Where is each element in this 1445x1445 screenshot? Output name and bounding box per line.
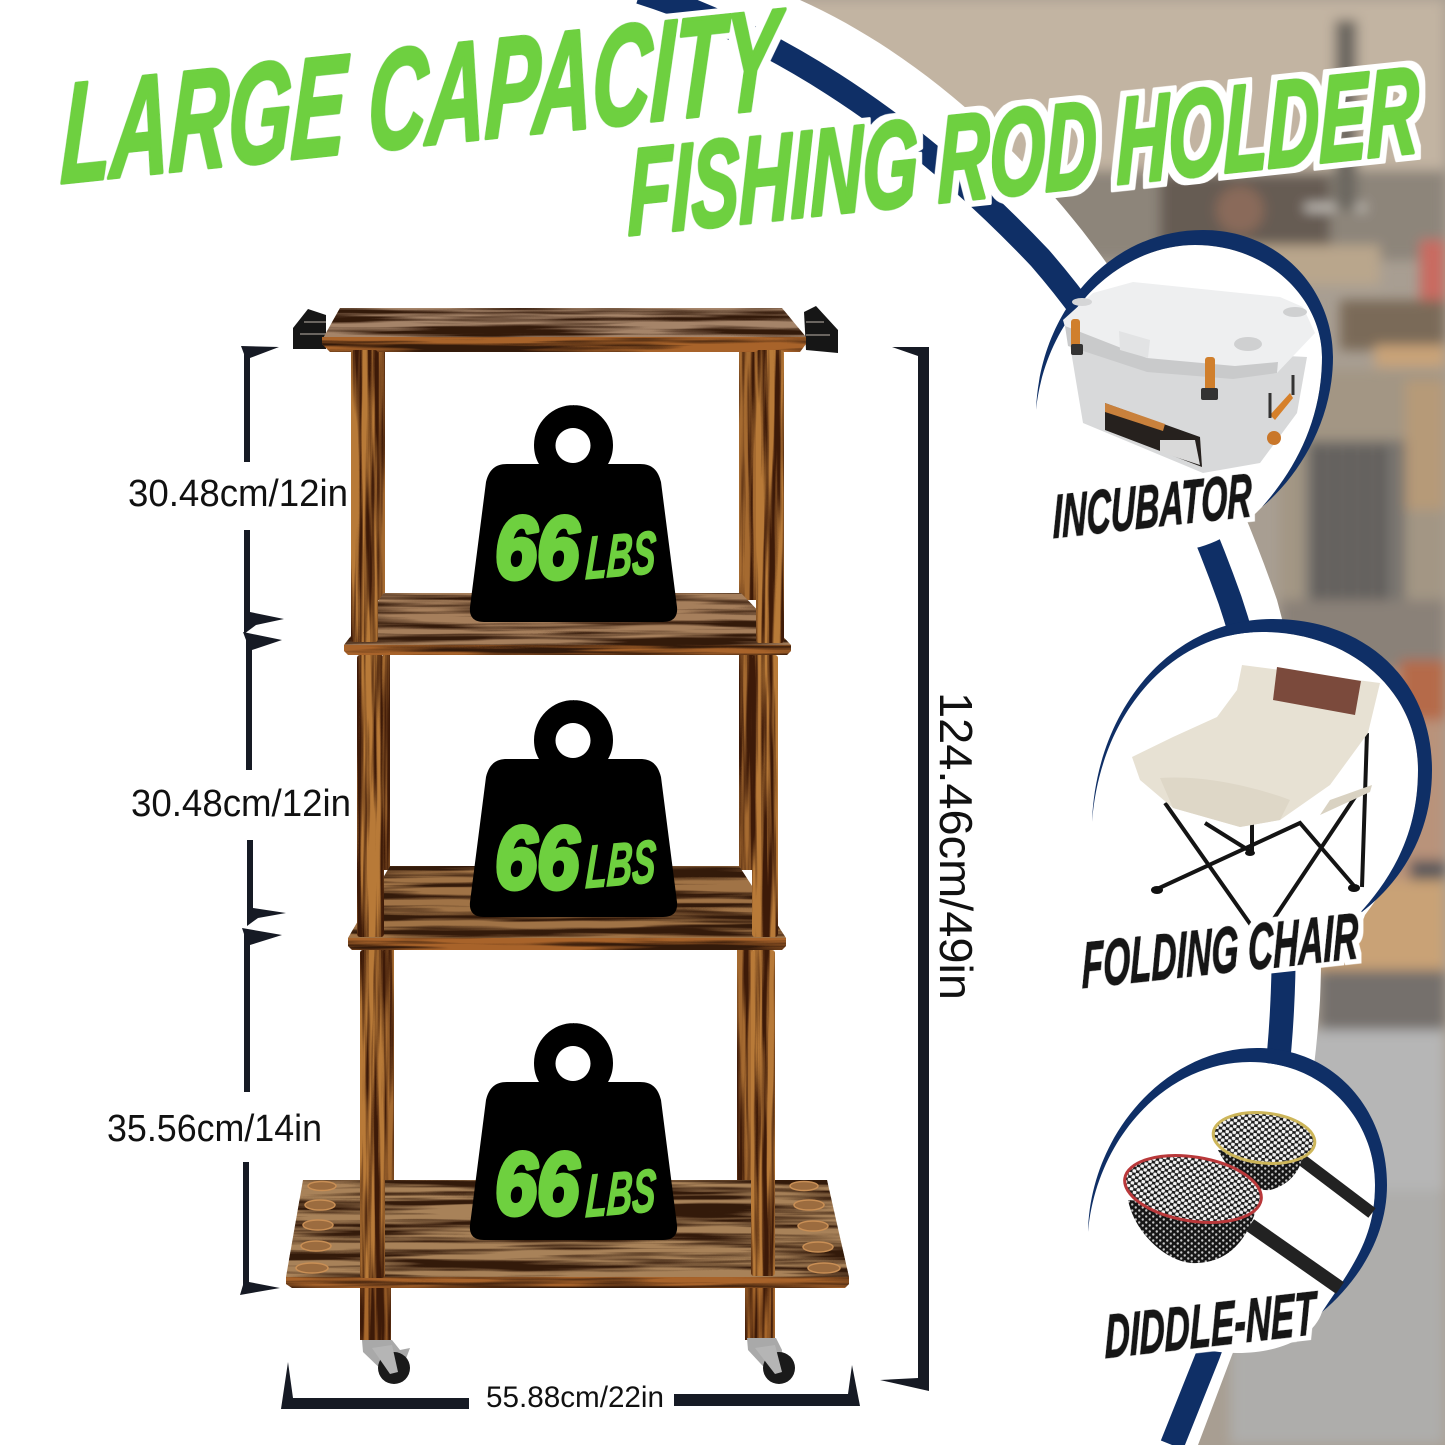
icon: nets xyxy=(1120,1108,1372,1288)
66 LBS label: 66 xyxy=(495,1134,580,1233)
rear posts xyxy=(376,350,759,1185)
width label: 55.88cm/22in xyxy=(486,1381,664,1414)
66 LBS label: LBS xyxy=(584,1156,658,1230)
height dimension line xyxy=(880,347,929,1391)
icon: chair xyxy=(1132,665,1380,928)
66 LBS label: 66 xyxy=(495,808,580,907)
casters xyxy=(362,1338,795,1384)
panel: diddle net xyxy=(1088,1048,1387,1371)
66 LBS label: LBS xyxy=(584,518,658,592)
66 LBS label: LBS xyxy=(584,827,658,901)
dimension label upper: 30.48cm/12in xyxy=(128,473,348,515)
height label: 124.46cm/49in xyxy=(930,692,982,1000)
dimension label lower: 35.56cm/14in xyxy=(107,1108,322,1150)
weight badge middle xyxy=(470,700,677,917)
top shelf xyxy=(322,308,806,352)
white disc xyxy=(1036,245,1322,550)
rod clips left xyxy=(293,309,326,349)
left dimension brackets xyxy=(240,346,286,1295)
panel: folding chair xyxy=(1082,619,1432,1002)
navy arc xyxy=(640,0,1284,1445)
legs xyxy=(360,1285,775,1340)
icon: cooler xyxy=(1063,282,1315,473)
white disc xyxy=(1092,632,1418,963)
navy ring xyxy=(1088,1048,1387,1312)
navy ring xyxy=(1036,230,1333,507)
panel: incubator xyxy=(1036,230,1333,551)
label: incubator: INCUBATOR xyxy=(1053,461,1252,551)
base shelf xyxy=(286,1180,849,1288)
upper shelf xyxy=(344,593,791,655)
weight badge bottom xyxy=(470,1023,677,1240)
white disc xyxy=(1088,1062,1375,1353)
front posts xyxy=(351,350,784,1278)
66 LBS label xyxy=(495,808,658,907)
width dimension line xyxy=(281,1362,860,1409)
rod holes xyxy=(296,1182,840,1273)
66 LBS label: 66 xyxy=(495,498,580,597)
middle shelf xyxy=(348,866,786,950)
66 LBS label xyxy=(495,498,658,597)
weight badge top xyxy=(470,405,677,622)
dimension label middle: 30.48cm/12in xyxy=(131,783,351,825)
66 LBS label xyxy=(495,1134,658,1233)
navy ring xyxy=(1092,619,1432,915)
wooden rod holder rack xyxy=(286,306,849,1384)
rod clips right xyxy=(804,306,838,353)
